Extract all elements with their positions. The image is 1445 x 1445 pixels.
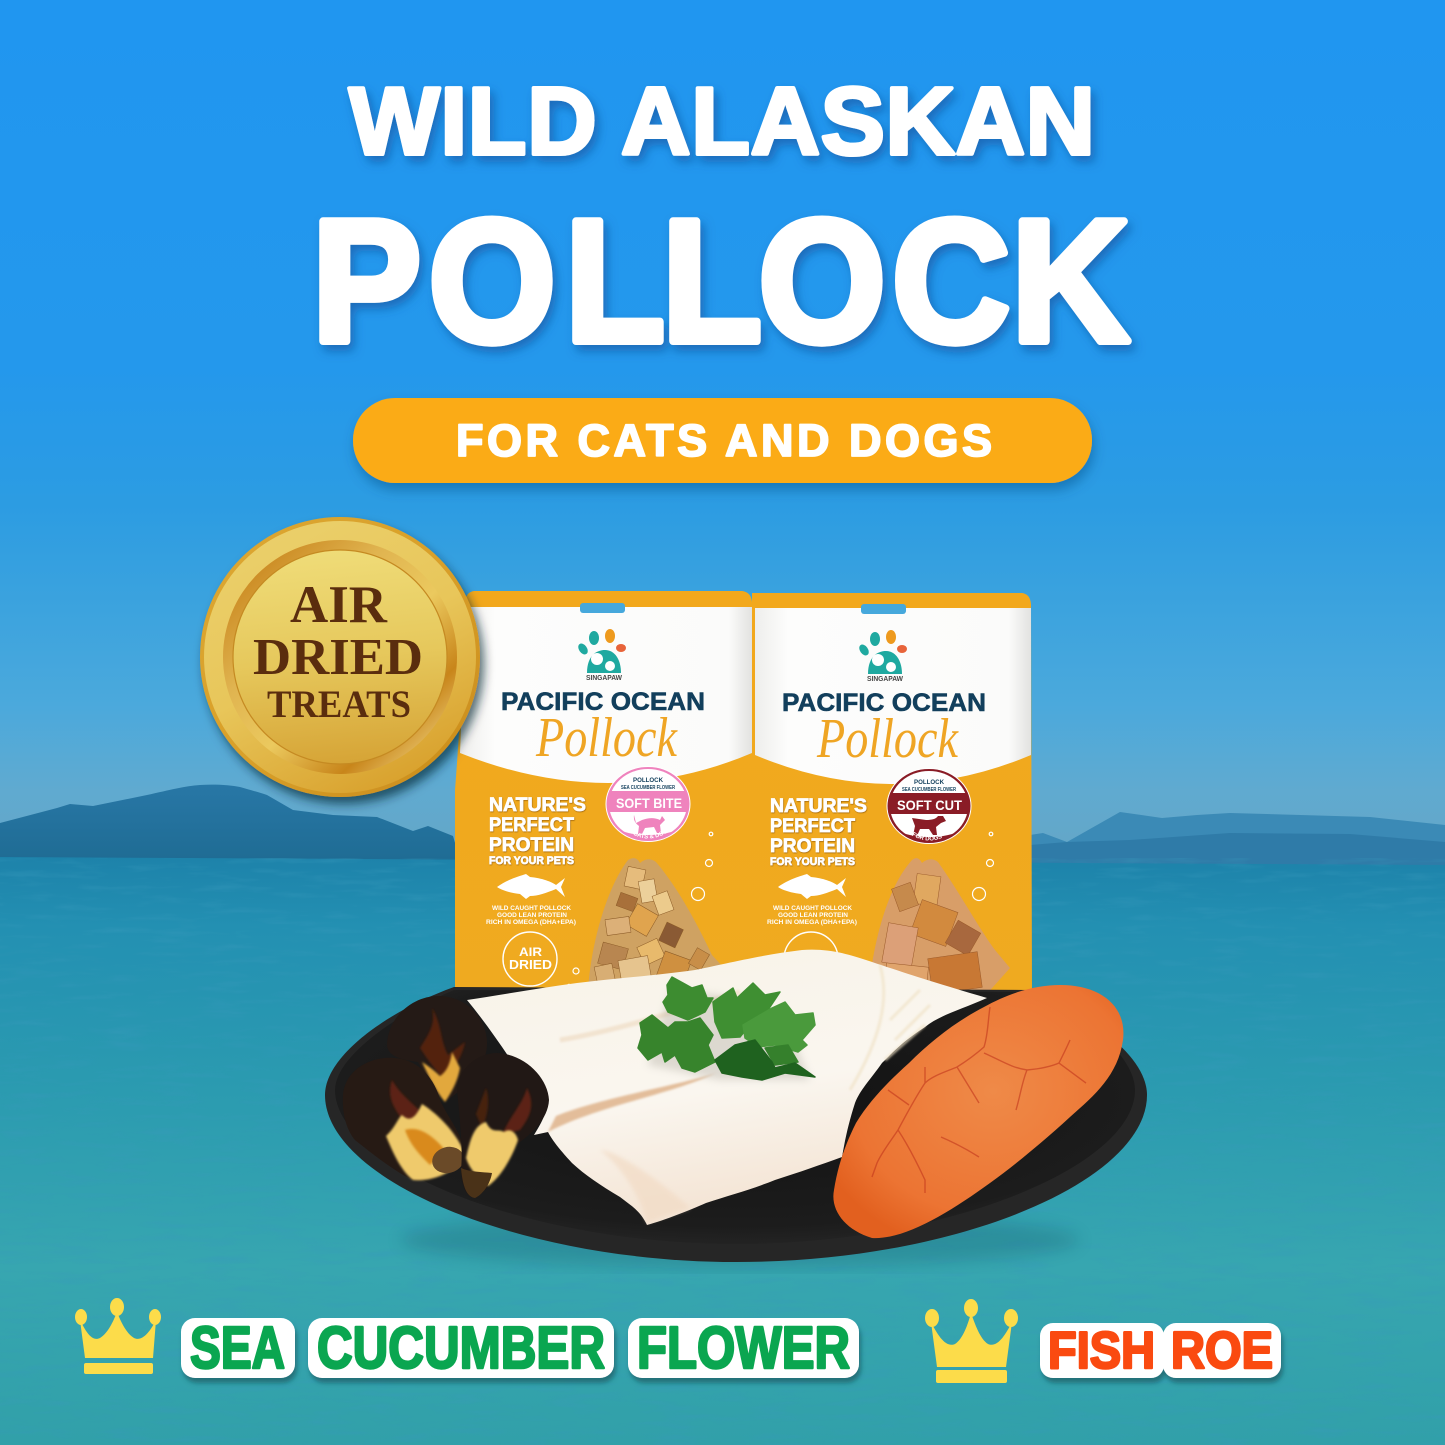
medal: air dried treats (200, 517, 480, 797)
pill text: FOR CATS AND DOGS (456, 415, 992, 466)
pill banner (353, 398, 1092, 483)
slogan: FOR YOUR PETS (770, 856, 855, 868)
pill shape (353, 398, 1092, 483)
flower one (387, 996, 487, 1102)
features: WILD CAUGHT POLLOCK (773, 905, 852, 912)
callout: fish roe (925, 1299, 1281, 1383)
pollock fillet (467, 950, 987, 1225)
features: GOOD LEAN PROTEIN (778, 912, 848, 919)
right island, near ridge (1030, 833, 1445, 866)
medal text: AIR (290, 576, 388, 634)
bag body (752, 593, 1032, 1000)
features: WILD CAUGHT POLLOCK (492, 905, 571, 912)
title: wild alaskan: WILD ALASKAN (349, 68, 1095, 175)
medal text: DRIED (253, 629, 423, 686)
slogan: NATURE'S (489, 795, 586, 816)
slogan (770, 796, 867, 868)
sea (0, 857, 1445, 1445)
plate with ingredients (325, 950, 1147, 1268)
plate surface (335, 990, 1135, 1244)
label (1048, 1322, 1273, 1380)
bag: soft cut (752, 593, 1032, 990)
label: CUCUMBER (317, 1315, 605, 1381)
product name: PACIFIC OCEAN (782, 689, 986, 717)
badge: soft cut: POLLOCK (914, 779, 944, 786)
slogan: PERFECT (770, 816, 855, 837)
icon: crown (925, 1299, 1018, 1383)
bag: soft bite (455, 591, 752, 988)
features (486, 905, 576, 926)
medal text (253, 576, 423, 726)
slogan: PROTEIN (770, 836, 855, 857)
plate shadow (400, 1212, 1080, 1268)
features: GOOD LEAN PROTEIN (497, 912, 567, 919)
white upper panel (755, 608, 1031, 784)
bubbles (567, 832, 713, 988)
features: RICH IN OMEGA (DHA+EPA) (767, 919, 857, 926)
badge: soft cut: FOR DOGS (912, 832, 942, 840)
script name: Pollock (535, 707, 678, 769)
slogan (489, 795, 586, 867)
label backing (1040, 1323, 1281, 1378)
medal face (233, 550, 447, 764)
outer edge (200, 517, 480, 797)
label (190, 1315, 850, 1381)
right island, far ridge (1030, 812, 1445, 866)
fish icon (497, 874, 565, 899)
label: FISH (1048, 1322, 1155, 1380)
air dried seal: DRIED (509, 957, 552, 972)
badge: soft bite: SOFT BITE (616, 796, 682, 811)
slogan: PROTEIN (489, 835, 574, 856)
left island (0, 785, 460, 860)
title: pollock: POLLOCK (312, 183, 1130, 378)
badge: soft cut: SEA CUCUMBER FLOWER (902, 787, 956, 793)
badge: soft cut: SOFT CUT (897, 798, 963, 813)
outer band (204, 521, 476, 793)
features (767, 905, 857, 926)
medal text: TREATS (267, 683, 411, 726)
script name: Pollock (816, 708, 959, 770)
white upper panel (460, 607, 752, 783)
product window with treats (868, 858, 1010, 997)
label: ROE (1171, 1322, 1273, 1380)
product name: PACIFIC OCEAN (501, 688, 705, 716)
hang tab (861, 604, 906, 614)
hang tab (580, 603, 625, 613)
label backing (181, 1318, 859, 1378)
singapaw logo (857, 630, 907, 683)
plate rim (325, 987, 1147, 1262)
fish icon (778, 874, 846, 899)
flower three (457, 1053, 549, 1198)
features: RICH IN OMEGA (DHA+EPA) (486, 919, 576, 926)
sea cucumber flowers (343, 996, 549, 1198)
bevel ring (223, 540, 457, 774)
singapaw logo (576, 629, 626, 682)
label: SEA (190, 1315, 285, 1381)
bag body (455, 591, 752, 1000)
sky (0, 0, 1445, 870)
slogan: NATURE'S (770, 796, 867, 817)
label: FLOWER (637, 1315, 850, 1381)
water texture (0, 858, 1445, 1445)
parsley (638, 977, 815, 1080)
icon: crown (75, 1298, 161, 1374)
fish roe (833, 985, 1123, 1238)
flower two (343, 1058, 467, 1180)
slogan: PERFECT (489, 815, 574, 836)
badge: soft bite (606, 767, 690, 842)
callout: sea cucumber flower (75, 1298, 859, 1381)
singapaw logo: SINGAPAW (586, 675, 622, 682)
air dried seal: AIR (519, 945, 542, 959)
bubbles (972, 832, 994, 900)
badge: soft bite: SEA CUCUMBER FLOWER (621, 785, 675, 791)
product window with treats (588, 858, 722, 992)
singapaw logo: SINGAPAW (867, 676, 903, 683)
air dried seal (784, 932, 838, 986)
slogan: FOR YOUR PETS (489, 855, 574, 867)
air dried seal (503, 932, 557, 986)
badge: soft bite: FOR CATS & DOGS (630, 832, 666, 838)
badge: soft cut (886, 769, 972, 844)
badge: soft bite: POLLOCK (633, 777, 663, 784)
